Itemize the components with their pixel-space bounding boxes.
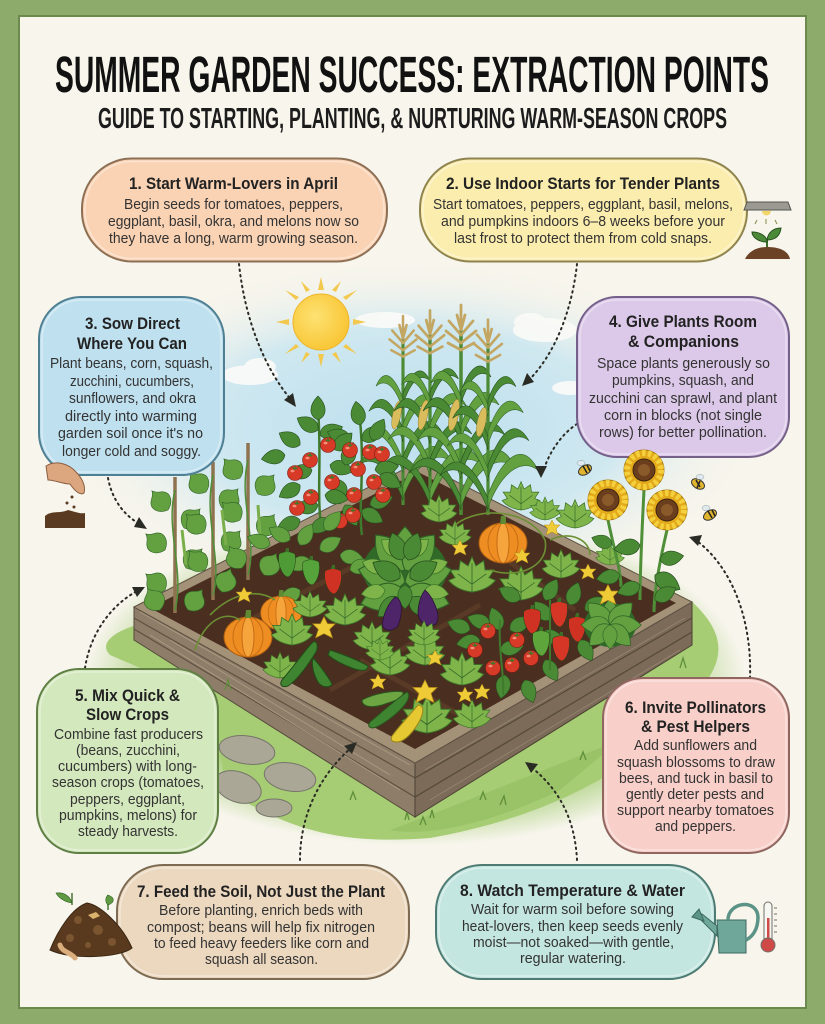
basil centre [355,526,455,623]
body 5: cucumbers) with long- [58,758,197,775]
body 5 [52,726,204,840]
body 2: last frost to protect them from cold snaps. [454,230,712,247]
panel 3: sow direct [39,297,224,475]
body 5: season crops (tomatoes, [52,774,204,791]
heading 1: 1. Start Warm-Lovers in April [129,174,338,193]
soil [150,472,676,749]
body 5: peppers, eggplant, [70,791,185,808]
sunflowers [588,450,687,612]
body 3: sunflowers, and okra [69,390,196,407]
basil right [580,564,641,651]
body 7: squash all season. [205,951,318,968]
icon: grow light and seedling [744,202,791,259]
body 1: they have a long, warm growing season. [109,230,358,247]
body 5: Combine fast producers [54,726,203,743]
body 7: compost; beans will help fix nitrogen [147,919,375,936]
body 6: squash blossoms to draw [617,754,775,771]
body 3: directly into warming [65,408,197,425]
body 6: and peppers. [655,818,736,835]
sky wash [65,260,755,600]
body 8: regular watering. [520,950,626,967]
icon: hand sowing seeds [45,463,85,528]
body 1 [108,196,359,247]
panel 5: quick and slow crops [37,669,218,853]
body 5: pumpkins, melons) for [59,807,197,824]
body 5: (beans, zucchini, [76,742,180,759]
sun [276,277,366,367]
body 6: Add sunflowers and [634,737,757,754]
heading 8: 8. Watch Temperature & Water [460,881,685,900]
panel 6: pollinators [603,678,789,853]
heading 5 [75,686,180,724]
panel 2: indoor starts [420,158,747,262]
bed right face [415,602,692,817]
arrow 3 [108,478,147,529]
bees [577,460,718,522]
tomato plants back [260,396,404,538]
heading 4 [609,312,757,351]
body 8: moist—not soaked—with gentle, [473,934,674,951]
corn stalks [356,305,538,515]
body 2: and pumpkins indoors 6–8 weeks before your [441,213,725,230]
squash front [362,621,491,742]
panel 4: plants room [577,297,789,457]
grass under bed [85,515,745,845]
body 4: pumpkins, squash, and [612,372,754,389]
body 7: Before planting, enrich beds with [159,902,363,919]
arrow 5 [85,587,145,668]
body 3: longer cold and soggy. [62,443,201,460]
heading 4: & Companions [628,332,739,351]
body 8 [462,901,683,967]
body 1: eggplant, basil, okra, and melons now so [108,213,359,230]
furrows [250,540,575,715]
body 4: rows) for better pollination. [599,424,767,441]
icon: watering can [692,905,758,953]
body 3: Plant beans, corn, squash, [50,355,213,372]
pumpkins front left [195,587,301,657]
body 4 [589,355,778,441]
heading 3: 3. Sow Direct [85,314,180,333]
heading 5: 5. Mix Quick & [75,686,180,705]
body 5: steady harvests. [78,823,178,840]
arrow 8 [525,762,577,860]
body 8: heat-lovers, then keep seeds evenly [462,918,683,935]
icon: compost pile [50,893,132,958]
panel 7: feed the soil [117,865,409,979]
tomatoes and peppers front right [445,576,609,705]
body 1: Begin seeds for tomatoes, peppers, [124,196,343,213]
arrow 7 [300,742,357,860]
heading 7: 7. Feed the Soil, Not Just the Plant [137,882,385,901]
body 3 [50,355,213,460]
body 4: corn in blocks (not single [604,407,762,424]
body 6: bees, and tuck in basil to [619,770,773,787]
bed left face [134,607,415,817]
body 2 [433,196,733,247]
body 3: garden soil once it's no [58,425,203,442]
body 4: Space plants generously so [597,355,770,372]
heading 3 [77,314,187,353]
panel 8: temperature and water [436,865,715,979]
heading 6 [625,698,766,736]
body 8: Wait for warm soil before sowing [471,901,674,918]
cucumbers [263,591,391,687]
body 6: support nearby tomatoes [617,802,774,819]
heading 5: Slow Crops [86,705,169,724]
body 3: zucchini, cucumbers, [70,373,194,390]
stepping stones [210,732,318,817]
pepper plants back [245,507,375,608]
heading 3: Where You Can [77,334,187,353]
arrow 1 [239,264,296,407]
heading 6: 6. Invite Pollinators [625,698,766,717]
bed rim [134,462,692,763]
icon: thermometer [761,902,777,952]
arrow 4 [535,424,577,478]
clouds [222,312,588,395]
arrow 6 [689,535,750,678]
heading 2: 2. Use Indoor Starts for Tender Plants [446,174,720,193]
body 4: zucchini can sprawl, and plant [589,390,778,407]
bean poles [139,443,285,616]
body 6: gently deter pests and [626,786,764,803]
grass tufts [225,658,686,825]
body 7 [147,902,375,968]
arrow 2 [522,264,577,386]
squash and pumpkin vines back right [421,482,624,600]
heading 4: 4. Give Plants Room [609,312,757,331]
raised garden bed [134,462,692,817]
heading 6: & Pest Helpers [641,717,750,736]
panel 1: start warm-lovers [82,158,387,262]
body 6 [617,737,775,835]
body 2: Start tomatoes, peppers, eggplant, basil, melons, [433,196,733,213]
body 7: to feed heavy feeders like corn and [154,935,369,952]
eggplants [382,590,438,630]
